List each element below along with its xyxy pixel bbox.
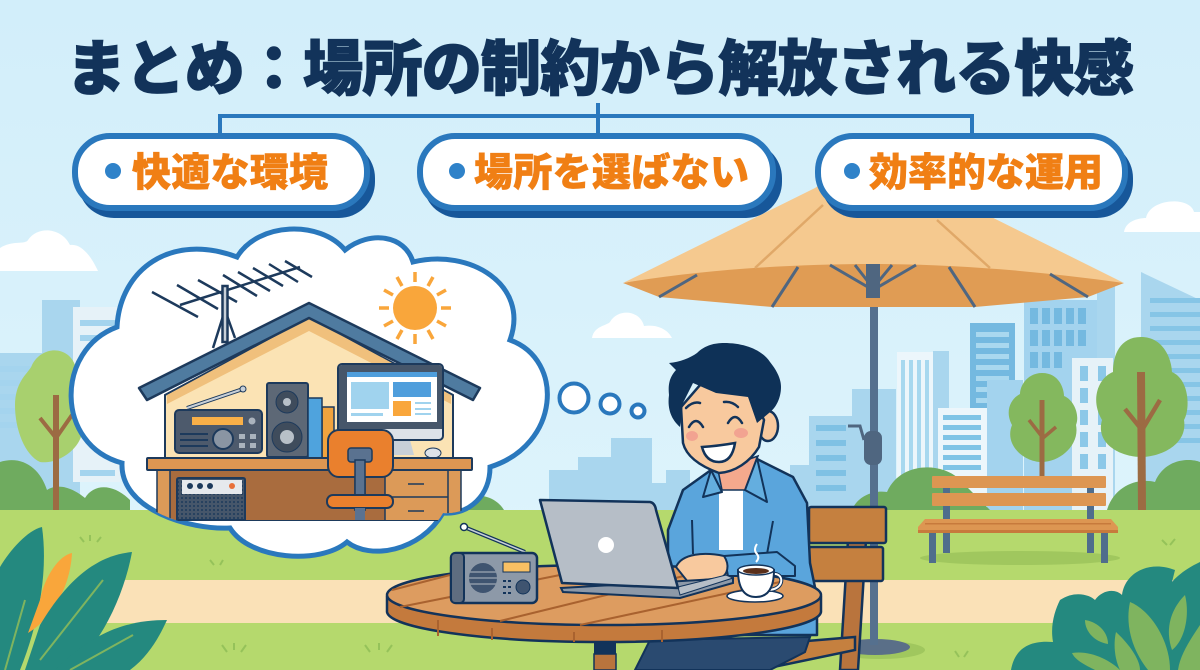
thought cloud bbox=[71, 229, 547, 556]
icon: sun bbox=[379, 272, 451, 344]
icon: laptop bbox=[540, 500, 733, 598]
grass tufts bbox=[80, 535, 1175, 657]
wooden chair back bbox=[759, 507, 886, 670]
ground bbox=[0, 510, 1200, 670]
icon: monitor bbox=[338, 364, 443, 458]
icon: portable radio bbox=[451, 524, 537, 603]
hair bbox=[669, 343, 781, 427]
desk bbox=[147, 458, 472, 520]
connector lines bbox=[220, 103, 972, 133]
collar bbox=[703, 458, 767, 502]
umbrella pole and base bbox=[835, 290, 925, 659]
pill: 場所を選ばない bbox=[420, 136, 782, 218]
jacket bbox=[668, 458, 817, 635]
room interior bbox=[139, 303, 480, 520]
icon: coffee cup bbox=[727, 544, 783, 602]
round table bbox=[387, 565, 821, 642]
pill: 快適な環境 bbox=[75, 136, 375, 218]
neck bbox=[718, 456, 758, 490]
cheeks bbox=[686, 428, 748, 441]
icon: speaker bbox=[267, 383, 308, 457]
park bench bbox=[918, 476, 1120, 565]
pill: 効率的な運用: 効率的な運用 bbox=[869, 152, 1103, 195]
mouth bbox=[702, 443, 735, 462]
thought bubbles bbox=[560, 384, 644, 418]
sleeve and hand bbox=[676, 552, 795, 582]
table pedestal bbox=[594, 638, 616, 670]
city skyline bbox=[0, 272, 1200, 510]
trousers bbox=[635, 637, 810, 670]
pill: 効率的な運用 bbox=[818, 136, 1133, 218]
plant: bottom right bbox=[1011, 562, 1200, 670]
bushes bbox=[0, 460, 1200, 510]
title: まとめ：場所の制約から解放される快感 bbox=[66, 36, 1134, 103]
books bbox=[308, 398, 334, 458]
pill: 快適な環境: 快適な環境 bbox=[132, 152, 328, 195]
left tree bbox=[15, 350, 84, 510]
ear bbox=[758, 411, 778, 441]
icon: orange chair bbox=[327, 430, 393, 520]
umbrella canopy bbox=[623, 150, 1124, 307]
icon: desk radio bbox=[175, 386, 262, 453]
icon: amplifier bbox=[177, 478, 245, 520]
eyes, brows, nose bbox=[686, 402, 742, 427]
face bbox=[681, 385, 764, 473]
t-shirt bbox=[719, 487, 743, 550]
icon: antenna bbox=[152, 261, 312, 348]
pill: 場所を選ばない: 場所を選ばない bbox=[474, 152, 749, 195]
jacket folds bbox=[692, 520, 773, 554]
plant: bottom left bbox=[0, 527, 167, 670]
large tree bbox=[1096, 337, 1188, 510]
small tree bbox=[1009, 373, 1077, 476]
clouds bbox=[0, 201, 1200, 338]
person bbox=[635, 343, 817, 670]
path bbox=[90, 580, 1200, 623]
house bbox=[139, 303, 480, 520]
